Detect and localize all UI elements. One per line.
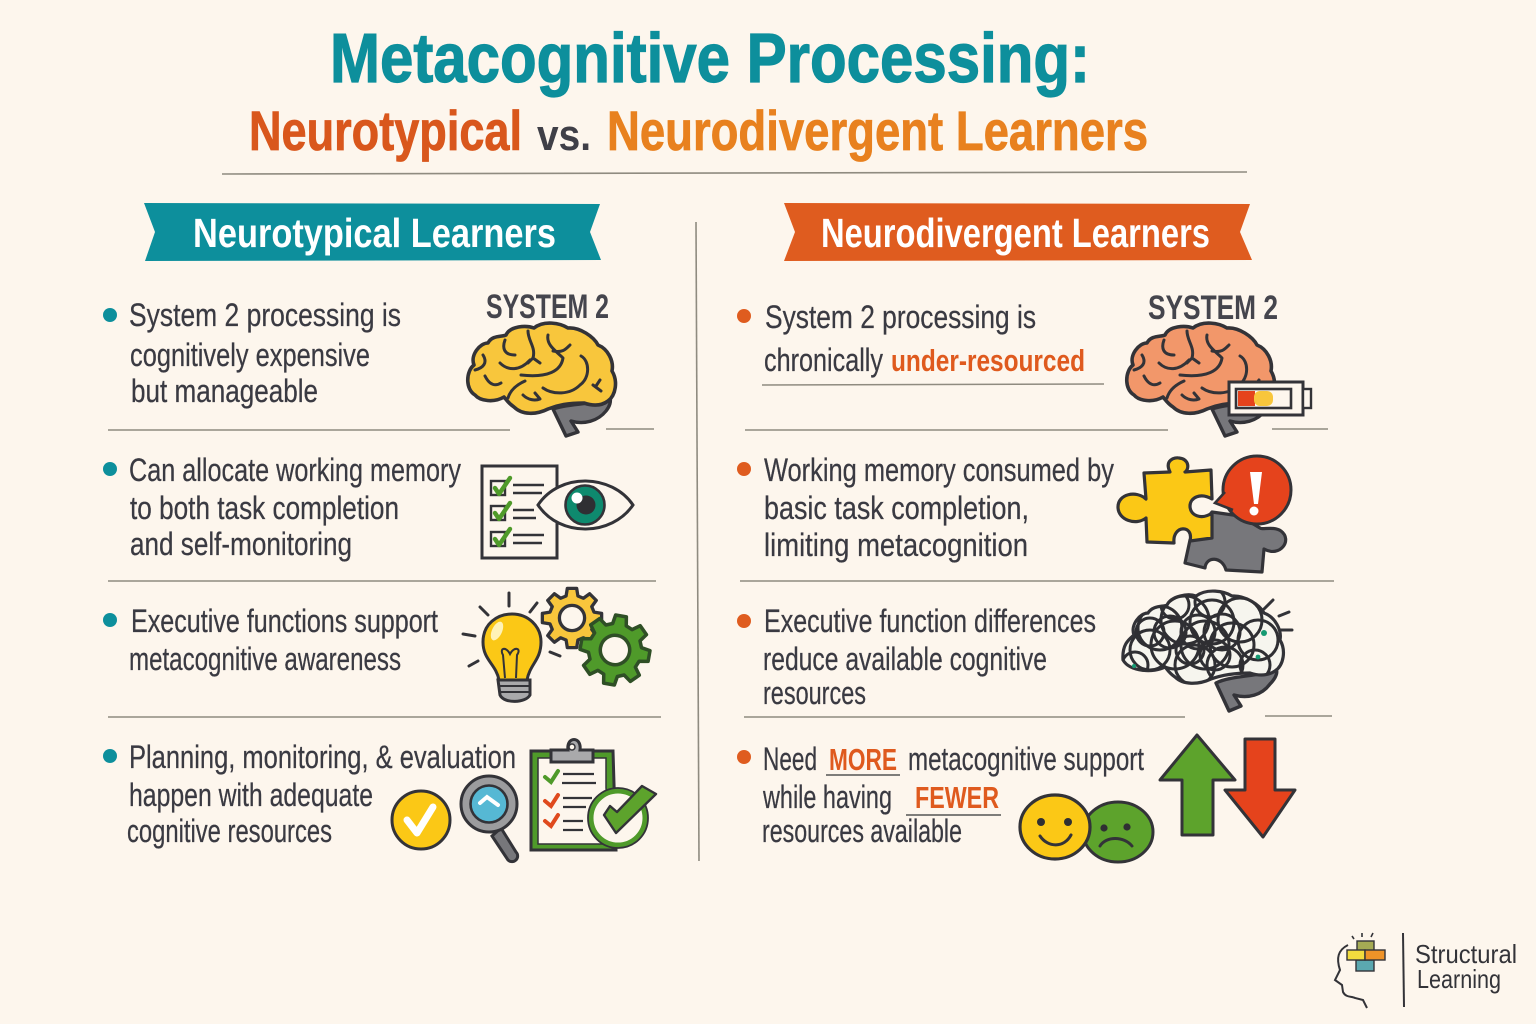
item 2 text: to both task completion: [130, 490, 399, 526]
panel: neurotypical learners: [103, 203, 661, 862]
item 1 text: System 2 processing is: [129, 297, 401, 333]
item 3 text: metacognitive awareness: [129, 641, 401, 677]
title line 1: Metacognitive Processing:: [330, 19, 1090, 97]
icon: system 2 orange brain with low battery: SYSTEM 2: [1148, 289, 1278, 327]
item 4 text: metacognitive support: [908, 741, 1144, 777]
item 1 text: [737, 299, 1085, 378]
item 4 text: resources available: [762, 813, 962, 849]
icon: magnifying glass: [461, 776, 518, 862]
item 4 text: MORE: [829, 742, 897, 777]
panel: neurodivergent learners: [737, 203, 1334, 862]
logo: structural learning: Learning: [1417, 964, 1501, 994]
item 3 text: Executive functions support: [131, 603, 438, 639]
item 1 text: [103, 297, 401, 409]
item 4 text: Need: [763, 741, 817, 777]
banner: neurotypical: [144, 203, 601, 261]
icon: yellow check badge: [392, 791, 450, 849]
item 4 text: [737, 741, 1144, 849]
item 4 text: [103, 739, 516, 849]
logo: structural learning: Structural: [1415, 939, 1517, 969]
banner: neurodivergent: [784, 203, 1252, 261]
icon: puzzle pieces and alert: [1118, 456, 1291, 572]
icon: system 2 yellow brain: SYSTEM 2: [486, 288, 609, 326]
item 2 text: limiting metacognition: [764, 527, 1028, 563]
item 1 text: under-resourced: [891, 343, 1085, 378]
icon: light bulb and gears: [463, 588, 655, 701]
icon: up and down arrows: [1160, 735, 1295, 837]
item 2 text: basic task completion,: [764, 490, 1029, 526]
item 4 text: happen with adequate: [129, 777, 373, 813]
item 3 text: Executive function differences: [764, 603, 1096, 639]
item 3 text: [103, 603, 438, 677]
item 1 text: System 2 processing is: [765, 299, 1036, 335]
item 2 text: [737, 452, 1114, 563]
item 4 text: FEWER: [915, 780, 999, 815]
banner: neurotypical: Neurotypical Learners: [193, 210, 556, 256]
item 4 text: Planning, monitoring, & evaluation: [129, 739, 516, 775]
item 3 text: [737, 603, 1096, 711]
icon: tangled brain: [1122, 587, 1292, 711]
item 2 text: Working memory consumed by: [764, 452, 1114, 488]
banner: neurodivergent: Neurodivergent Learners: [821, 210, 1210, 256]
icon: system 2 yellow brain: [468, 288, 615, 436]
icon: happy and sad faces: [1020, 795, 1153, 862]
icon: clipboard with check: [531, 740, 656, 850]
icon: checklist and eye: [482, 466, 633, 558]
icon: system 2 orange brain with low battery: [1127, 289, 1311, 436]
item 2 text: and self-monitoring: [130, 526, 352, 562]
item 3 text: resources: [763, 675, 866, 711]
title line 2: neurotypical: Neurotypical: [249, 99, 522, 162]
item 1 text: cognitively expensive: [130, 337, 370, 373]
logo: structural learning: [1335, 933, 1517, 1008]
title line 2: neurodivergent learners: Neurodivergent Learners: [607, 99, 1148, 162]
item 2 text: [103, 452, 461, 562]
item 1 text: chronically: [764, 342, 883, 378]
title line 2: vs: vs.: [537, 111, 591, 160]
item 4 text: cognitive resources: [127, 813, 332, 849]
item 2 text: Can allocate working memory: [129, 452, 461, 488]
title: [249, 19, 1148, 162]
item 1 text: but manageable: [131, 373, 318, 409]
item 4 text: while having: [762, 779, 892, 815]
item 3 text: reduce available cognitive: [763, 641, 1047, 677]
